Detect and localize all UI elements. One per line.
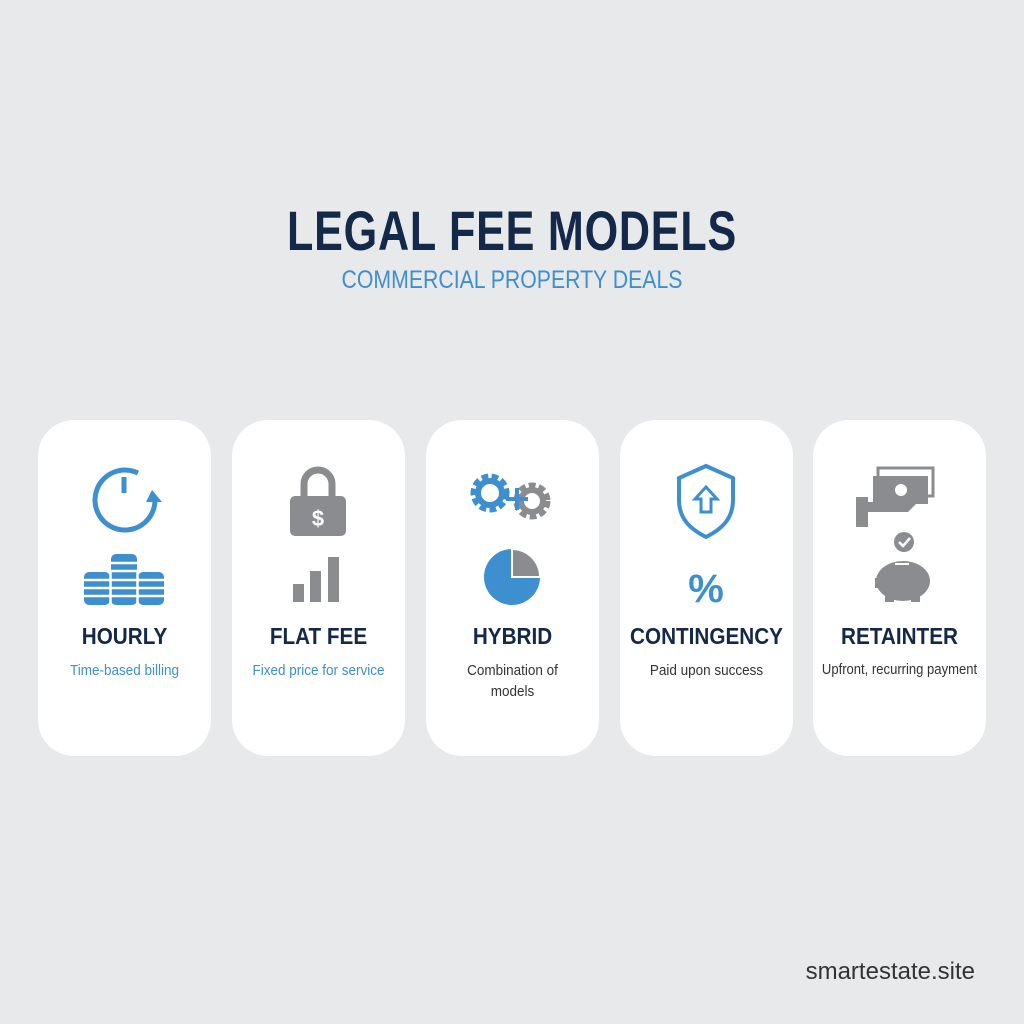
label: HOURLY [82,623,167,649]
description: Fixed price for service [252,662,385,679]
panel: flat fee [232,420,405,756]
panel: hourly [38,420,211,756]
title: LEGAL FEE MODELS [287,199,737,262]
description [467,662,558,700]
icon: shield and percent: % [688,567,724,611]
subtitle: COMMERCIAL PROPERTY DEALS [342,266,682,294]
label: FLAT FEE [270,623,367,649]
description: Time-based billing [70,662,179,679]
label: RETAINTER [841,623,958,649]
description: Combination of [467,662,558,679]
icon: hand with cash and piggy bank [856,466,934,602]
panel: retainter [813,420,986,756]
panel: contingency [620,420,793,756]
description: Paid upon success [650,662,763,679]
description: Upfront, recurring payment [822,662,977,678]
icon: gears and pie [470,474,550,605]
panel: hybrid [426,420,599,756]
footer: website: smartestate.site [806,958,975,985]
icon: shield and percent [677,464,735,611]
label: HYBRID [473,623,552,649]
label: CONTINGENCY [630,623,783,649]
icon: lock and bars [290,466,346,602]
icon: clock and coins [84,468,164,605]
description: models [491,683,534,700]
icon: lock and bars: $ [312,506,324,531]
